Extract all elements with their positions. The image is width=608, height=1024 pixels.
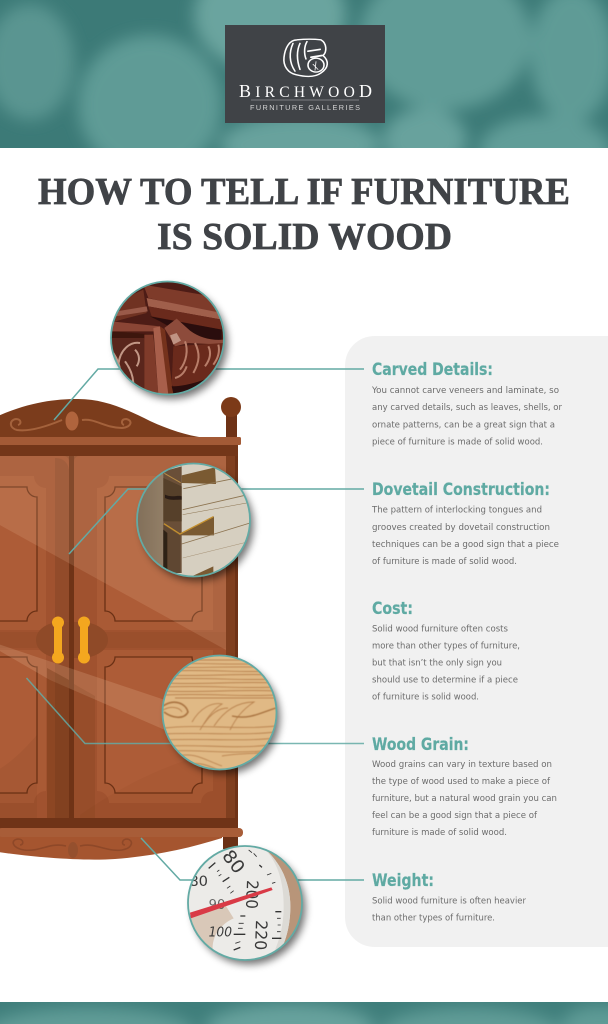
connector: dovetail (69, 489, 364, 554)
text block: dovetail construction: grooves created by dovetail construction (372, 522, 550, 533)
light diagonal band (0, 644, 165, 730)
left carved panel (112, 338, 144, 388)
brand subtitle: FURNITURE GALLERIES (250, 103, 360, 112)
text block: cost: Solid wood furniture often costs (372, 624, 508, 634)
text block: dovetail construction: of furniture is made of solid wood. (372, 556, 517, 567)
text block: wood grain (372, 735, 557, 838)
panel: text background (345, 336, 608, 947)
carved column (172, 343, 223, 386)
scale numbers (192, 850, 268, 950)
connector: wood grain (26, 678, 364, 744)
dark right column (74, 684, 95, 818)
text block: carved details: Carved Details: (372, 360, 493, 379)
text block: weight: Weight: (372, 871, 434, 890)
text block: cost: should use to determine if a piece (372, 674, 518, 686)
text block: weight: Solid wood furniture is often heavier (372, 896, 526, 906)
right door (74, 456, 226, 818)
skirt (0, 836, 222, 860)
photo: carved details (105, 278, 230, 400)
title: HOW TO TELL IF FURNITURE (38, 171, 570, 213)
text block: weight: than other types of furniture. (372, 912, 495, 924)
text block: carved details: ornate patterns, can be a great sign that a (372, 420, 555, 430)
text block: cost: but that isn’t the only sign you (372, 658, 502, 668)
text block: carved details: piece of furniture is made of solid wood. (372, 436, 543, 448)
text block: cost: of furniture is solid wood. (372, 692, 479, 702)
brand name: B IRCHWOOD (239, 81, 372, 101)
scale numbers: 200 (242, 880, 262, 909)
left door column (55, 458, 69, 818)
rail (0, 632, 226, 648)
top post (221, 397, 241, 440)
photo: dovetail joint (130, 458, 258, 583)
header background: blurred logs (0, 0, 608, 148)
handle medallion (36, 622, 108, 658)
scale ticks (209, 850, 281, 950)
lower sheen (80, 750, 226, 818)
left sheen (0, 735, 37, 818)
text block: wood grain: Wood grains can vary in texture based on (372, 759, 552, 770)
tongues (182, 467, 216, 484)
text block: carved details (371, 360, 562, 448)
title (38, 171, 570, 258)
photo: wood grain (160, 653, 280, 774)
logo (225, 25, 385, 123)
text block: wood grain: feel can be a good sign that a piece of (372, 810, 538, 821)
skirt ornament (13, 839, 131, 858)
text block: dovetail construction: The pattern of interlocking tongues and (371, 504, 542, 516)
leg (223, 836, 238, 849)
capital (164, 319, 223, 346)
panels (0, 487, 202, 793)
body (0, 445, 238, 830)
text block: wood grain: furniture, but a natural wood grain you can (372, 793, 557, 804)
connector: weight (141, 838, 364, 880)
handles (52, 616, 90, 664)
text block: wood grain: the type of wood used to make a piece of (372, 776, 551, 787)
scale numbers: 80 (217, 846, 249, 878)
upper mouldings (144, 286, 216, 312)
scale numbers: 220 (251, 920, 271, 951)
footer band: blurred logs (0, 1002, 608, 1024)
left door (0, 456, 69, 818)
connector: carved details (54, 369, 364, 420)
crown (0, 399, 205, 440)
raised frames (0, 476, 213, 803)
dark centre columns (47, 668, 69, 818)
text block: wood grain: Wood Grain: (372, 735, 469, 754)
text block: cost: Cost: (372, 599, 413, 618)
text block: weight (372, 871, 526, 924)
text block: cost: more than other types of furniture, (372, 640, 520, 652)
light diagonal overlay (0, 456, 226, 650)
text block: dovetail construction (371, 480, 559, 567)
text block: cost (372, 599, 520, 702)
text block: carved details: You cannot carve veneers and laminate, so (371, 385, 559, 396)
text block: dovetail construction: Dovetail Construction: (372, 480, 550, 499)
cornice (0, 437, 241, 445)
title: IS SOLID WOOD (157, 216, 452, 258)
base moulding (0, 828, 243, 837)
icon: log with letter B (284, 39, 327, 76)
text block: carved details: any carved details, such as leaves, shells, or (372, 402, 562, 413)
text block: wood grain: furniture is made of solid wood. (372, 827, 507, 838)
scale numbers: 90 (209, 898, 225, 913)
vertical frame (144, 335, 158, 395)
text block: dovetail construction: techniques can be a good sign that a piece (372, 539, 559, 550)
photo: weight scale (182, 840, 308, 966)
scale numbers: 80 (189, 874, 208, 890)
scale numbers: 100 (209, 926, 232, 941)
crown scroll ornament (11, 412, 131, 430)
wardrobe illustration (0, 397, 243, 860)
